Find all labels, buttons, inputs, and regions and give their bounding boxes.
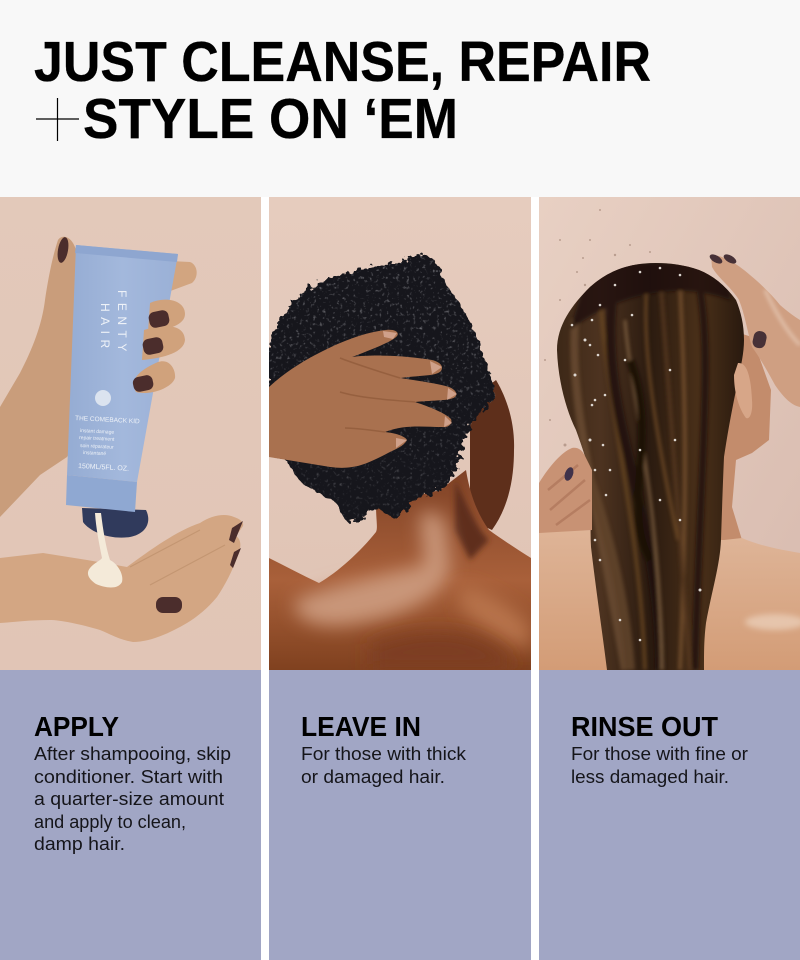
body text [571,744,748,787]
body text: conditioner. Start with [34,767,223,787]
water specks [544,209,651,446]
droplets [571,267,702,641]
body text: After shampooing, skip [34,744,231,764]
upper hand [0,237,80,517]
photo: hand in curly hair, wet back [269,197,531,670]
text panel [539,670,800,960]
nails [56,236,170,393]
photo: rinsing long wet hair [539,197,800,675]
upper hand [711,255,800,407]
tube label: THE COMEBACK KID [75,415,140,425]
title: STYLE ON ‘EM [83,87,458,151]
hair glints [269,250,499,530]
body text: and apply to clean, [34,812,186,832]
panel: apply [0,197,261,960]
neck shade [455,480,489,560]
heading: RINSE OUT [571,711,718,742]
head side [470,380,514,530]
body text: or damaged hair. [301,767,445,787]
back [539,530,607,670]
body text [34,744,231,854]
cream [88,513,122,588]
title: JUST CLEANSE, REPAIR [34,30,651,94]
neck [721,334,771,540]
title [34,30,651,151]
heading: LEAVE IN [301,711,421,742]
lower hand [539,448,592,533]
shoulder shine [295,512,450,626]
tube label [75,290,140,473]
photo: product tube squeezed onto hand [0,197,261,670]
nails [708,252,768,349]
back and neck [269,470,531,670]
index finger tip [172,261,197,290]
tube label: soin réparateur [80,443,114,451]
fingers [134,300,185,393]
curly hair [269,255,496,523]
panel: rinse out [539,197,800,960]
text panel [269,670,531,960]
tube [67,245,178,482]
tube label: FENTY [115,290,129,357]
body text: For those with fine or [571,744,748,764]
body text: less damaged hair. [571,767,729,787]
body text: a quarter-size amount [34,789,224,809]
panel: leave in [269,197,531,960]
ear [734,363,752,418]
page background [0,0,800,197]
tube label: repair treatment [79,435,115,443]
nails lower [156,521,243,613]
cap [82,508,148,538]
tube label: instant damage [80,428,115,436]
body text: damp hair. [34,834,125,854]
body text: For those with thick [301,744,467,764]
hair [550,255,750,675]
hand [269,330,456,468]
tube label: 150ML/5FL. OZ. [78,463,129,473]
heading: APPLY [34,711,119,742]
body text [301,744,467,787]
hair strands [570,263,730,670]
text panel [0,670,261,960]
tube label: instantané [83,450,106,457]
tube label: HAIR [98,303,112,354]
lower hand [0,515,243,642]
